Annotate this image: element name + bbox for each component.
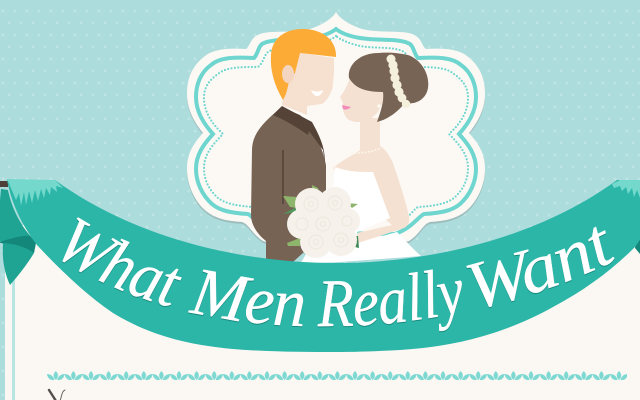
curved title text xyxy=(62,217,615,332)
scalloped divider xyxy=(47,371,627,381)
wedding dress xyxy=(300,167,421,264)
lapel xyxy=(273,106,325,163)
earring xyxy=(377,104,381,108)
groom xyxy=(251,29,336,262)
left ribbon fringe xyxy=(7,179,63,206)
hair xyxy=(271,29,336,100)
face and neck xyxy=(282,53,334,115)
leaves xyxy=(283,185,359,248)
rose spirals xyxy=(296,196,352,249)
hair xyxy=(349,53,428,122)
hanging bar xyxy=(0,181,8,187)
bride skin xyxy=(333,118,409,243)
title ribbon xyxy=(7,180,640,352)
ear xyxy=(282,65,294,83)
partial flourish at bottom xyxy=(49,390,65,400)
curved title text: Men xyxy=(188,270,304,328)
bouquet xyxy=(283,185,360,258)
right ribbon fringe xyxy=(612,180,640,198)
lips xyxy=(342,105,351,110)
teal ring xyxy=(196,29,476,234)
face xyxy=(340,70,383,122)
left ribbon tail xyxy=(0,181,36,285)
curved title text: Really xyxy=(318,269,462,332)
white collar xyxy=(281,106,312,122)
scalloped frame xyxy=(187,12,485,262)
right ribbon tail xyxy=(635,235,640,254)
paper panel xyxy=(5,225,640,400)
dotted ring xyxy=(204,36,468,224)
curved title text: Want xyxy=(466,226,615,308)
rose cluster xyxy=(287,187,360,258)
flower headband xyxy=(386,54,410,108)
curved title text: What xyxy=(62,217,182,307)
bride xyxy=(300,53,428,264)
pearl necklace xyxy=(352,148,381,153)
smile xyxy=(311,90,323,96)
suit jacket xyxy=(251,107,326,262)
sleeve seam xyxy=(282,150,284,204)
